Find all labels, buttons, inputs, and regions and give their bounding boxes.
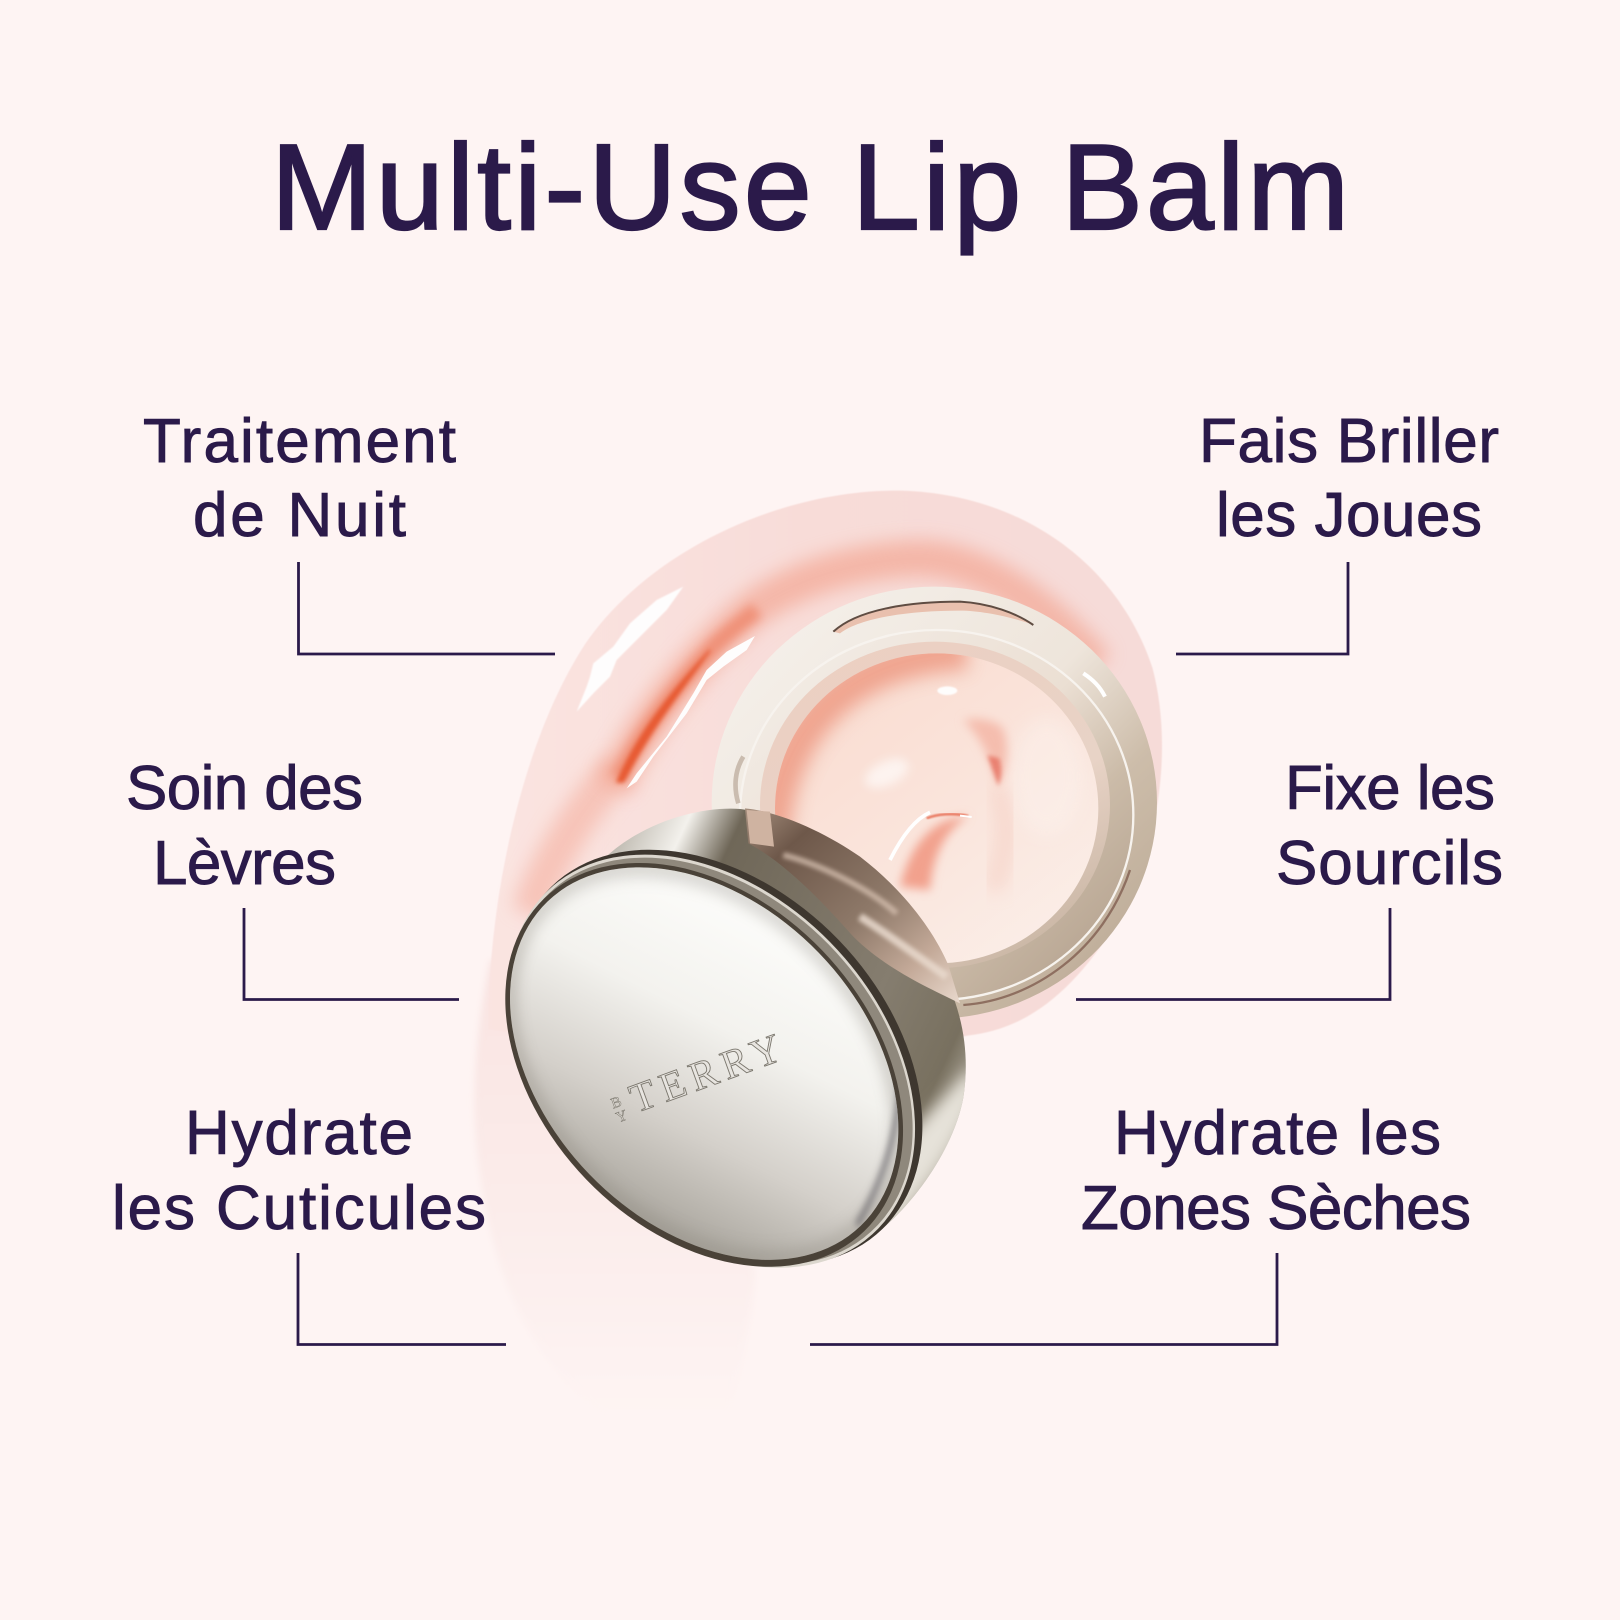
jar inner ring <box>760 642 1110 968</box>
swatch: main smear <box>488 491 1162 1072</box>
swatch: faint lower smear <box>474 960 755 1415</box>
swatch: orange core glow <box>618 610 757 778</box>
leader line <box>1176 562 1348 654</box>
leader line <box>244 908 459 1000</box>
lid bevel <box>450 781 958 1349</box>
lid engraved brand: B <box>609 1094 624 1112</box>
lid silver ring <box>453 773 970 1349</box>
lid face <box>457 788 952 1340</box>
lid right side light band <box>886 1065 966 1225</box>
label: Hydrate <box>185 1099 413 1168</box>
lid face edge shading <box>510 868 898 1260</box>
swatch: gloss highlight upper <box>577 587 683 712</box>
jar left glint <box>736 757 743 803</box>
glass pale edge <box>747 810 774 847</box>
label: les Cuticules <box>112 1174 486 1243</box>
swatch: orange core <box>617 650 710 782</box>
cream crease <box>963 719 1008 786</box>
label: Zones Sèches <box>1081 1174 1471 1243</box>
label: Lèvres <box>153 829 336 898</box>
callout: Traitement de Nuit <box>143 407 555 654</box>
lid rings and face <box>505 850 922 1268</box>
infographic canvas <box>116 140 1502 1346</box>
swatch: colour bands and gloss <box>530 558 1097 913</box>
label: Soin des <box>126 754 363 823</box>
callout: Hydrate les Cuticules <box>112 1099 506 1344</box>
lid <box>505 808 966 1268</box>
label: Sourcils <box>1276 829 1503 898</box>
swatch: upper peach band <box>613 558 1097 787</box>
callout: Hydrate les Zones Sèches <box>810 1099 1471 1344</box>
callout: Soin des Lèvres <box>126 754 459 1000</box>
label: de Nuit <box>193 481 406 550</box>
jar <box>712 587 1157 1019</box>
callout: Fais Briller les Joues <box>1176 407 1499 654</box>
lid glass reflection <box>745 808 960 1003</box>
swatch: gloss highlight lower <box>627 636 755 788</box>
jar right gloss <box>1083 673 1105 697</box>
label: Fais Briller <box>1199 407 1499 476</box>
lid engraved brand: TERRY <box>623 1024 788 1121</box>
title: Multi-Use Lip Balm <box>271 119 1349 255</box>
product image: balm jar, lid and swatch <box>476 490 1162 1268</box>
jar glass ring <box>740 630 1133 1000</box>
leader line <box>298 1253 506 1344</box>
leader line <box>810 1253 1277 1344</box>
jar outer rim <box>712 587 1157 1019</box>
leader line <box>1076 908 1390 1000</box>
lid outer ring <box>456 765 979 1350</box>
cream swirl <box>772 652 1083 890</box>
jar cream surface <box>775 653 1098 963</box>
jar top slit <box>833 602 1033 633</box>
cream swoosh <box>900 816 968 890</box>
label: Fixe les <box>1285 754 1495 823</box>
jar bottom line <box>963 870 1130 1005</box>
lid metal side <box>608 808 966 1228</box>
lid engraved brand: Y <box>614 1108 630 1126</box>
cream soft highlights <box>865 758 909 789</box>
cream shadow edge <box>772 652 967 837</box>
leader line <box>298 562 555 654</box>
callout: Fixe les Sourcils <box>1076 754 1503 1000</box>
label: Hydrate les <box>1114 1099 1441 1168</box>
swatch: lower peach band <box>530 767 620 913</box>
label: les Joues <box>1216 481 1482 550</box>
glass stripes <box>783 855 897 913</box>
label: Traitement <box>143 407 456 476</box>
